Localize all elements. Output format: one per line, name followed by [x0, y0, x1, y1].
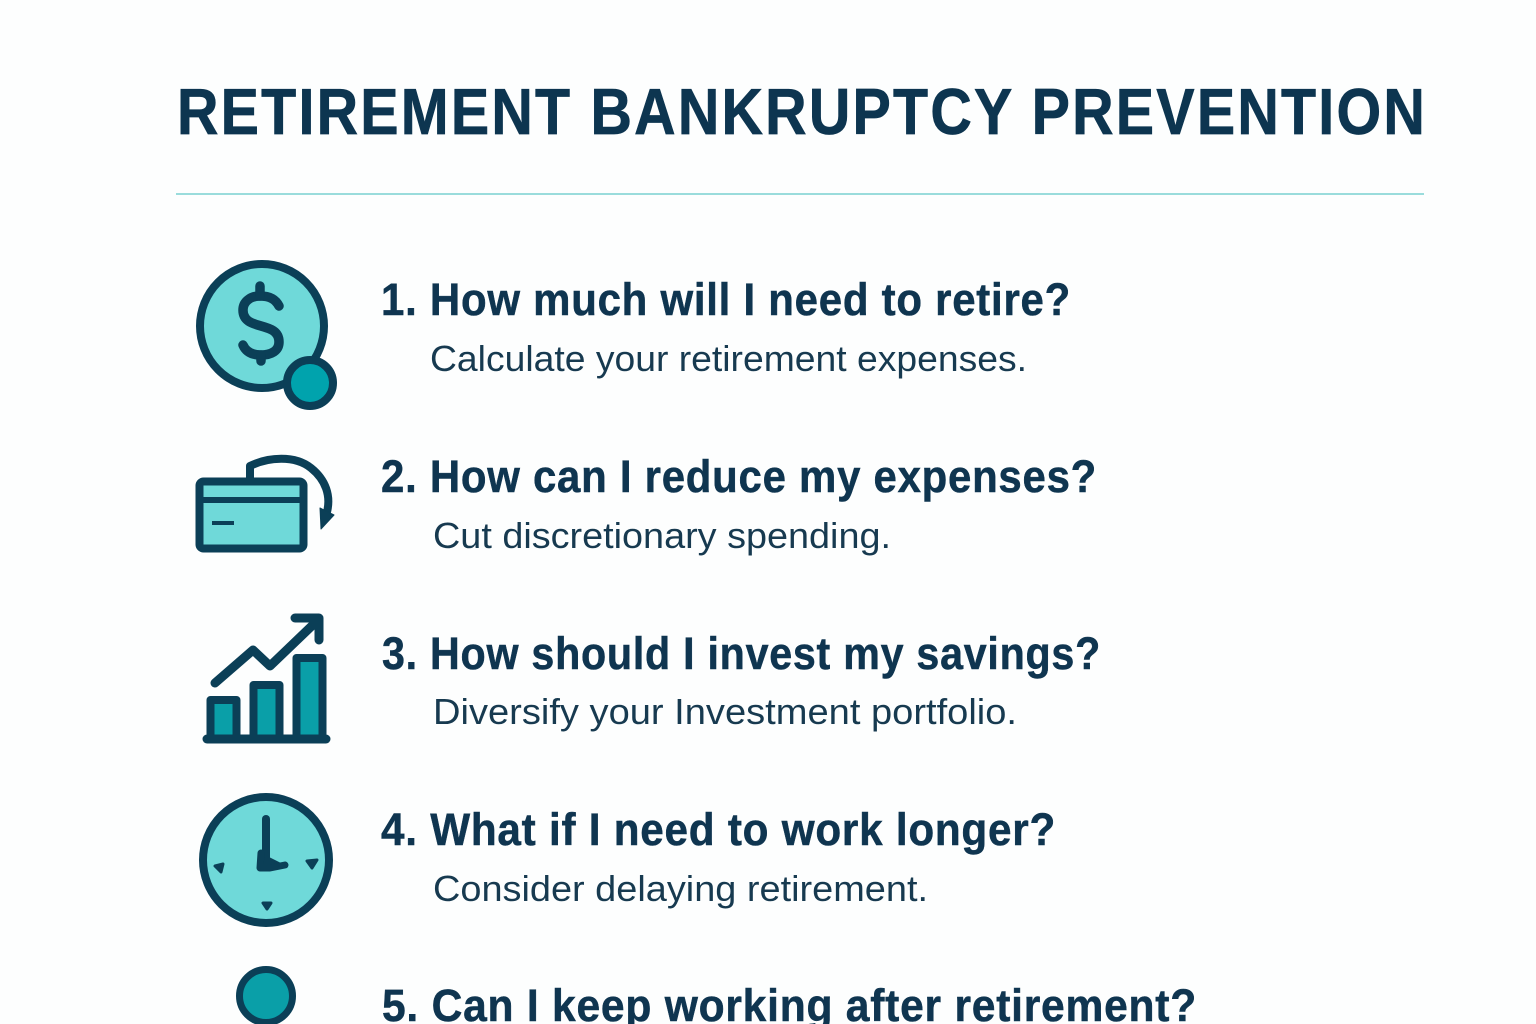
item 4 text: 4. What if I need to work longer?: [381, 804, 1056, 855]
item 1 text: 1. How much will I need to retire?: [381, 274, 1071, 325]
icon: dollar coin: [200, 264, 333, 406]
icon: clock: [203, 797, 329, 923]
item 3 text: Diversify your Investment portfolio.: [433, 691, 1017, 732]
item 4 text: [381, 804, 1056, 909]
item 2 text: Cut discretionary spending.: [433, 515, 891, 556]
icon: partial circle: [240, 970, 292, 1022]
icon: credit card with arrow: [199, 459, 334, 548]
item 2 text: 2. How can I reduce my expenses?: [381, 451, 1097, 502]
item 1 text: [381, 274, 1071, 379]
item 4 text: Consider delaying retirement.: [433, 868, 928, 909]
item 1 text: Calculate your retirement expenses.: [430, 338, 1027, 379]
item 3 text: [382, 628, 1101, 732]
item 3 text: 3. How should I invest my savings?: [382, 628, 1101, 679]
icon: growth bar chart: [207, 618, 326, 739]
item 2 text: [381, 451, 1097, 556]
